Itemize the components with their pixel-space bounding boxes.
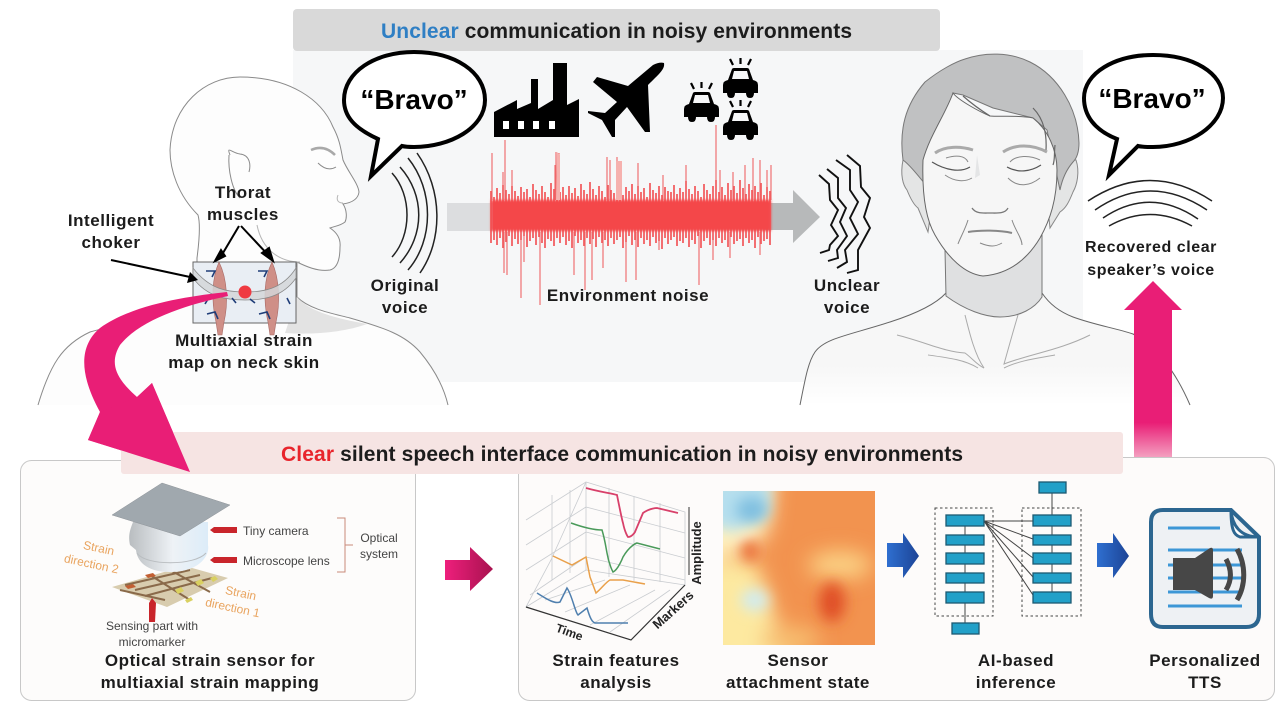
tiny camera plate <box>112 483 230 536</box>
icon: TTS document with speaker <box>1151 510 1259 627</box>
label: unclear voice: Unclear <box>814 276 880 295</box>
brows and closed eyes <box>932 146 1047 185</box>
chart: 3D strain features <box>526 482 689 640</box>
grid <box>526 482 685 640</box>
hair <box>902 54 1079 190</box>
arrow: pink up arrow <box>1124 281 1182 458</box>
neck <box>945 235 1042 317</box>
label: intelligent choker: choker <box>81 233 141 252</box>
choker band <box>193 268 296 300</box>
label: sensor attachment state: attachment state <box>726 673 870 692</box>
label: recovered clear speaker's voice: Recovered clear <box>1085 239 1217 256</box>
label: intelligent choker: Intelligent <box>68 211 154 230</box>
label: strain direction 2: direction 2 <box>63 551 120 577</box>
arrow: choker pointer <box>111 260 198 283</box>
strain curve: green <box>571 523 660 572</box>
microscope lens body <box>129 522 208 572</box>
muscle: right <box>265 262 279 335</box>
panel: processing pipeline <box>518 458 1274 700</box>
icon: recovered voice waves <box>1088 180 1212 226</box>
sensing chip <box>112 566 228 607</box>
label: multiaxial strain map: map on neck skin <box>168 353 320 372</box>
icon: unclear voice squiggles <box>819 155 870 273</box>
arrow: grey voice arrow <box>447 190 820 243</box>
label: tiny camera: Tiny camera <box>243 524 309 538</box>
optical system bracket <box>337 518 353 572</box>
label: unclear voice: voice <box>824 298 870 317</box>
label: amplitude axis: Amplitude <box>689 521 704 585</box>
figure: speaker wearing choker <box>38 77 448 405</box>
red pointers <box>149 527 237 622</box>
label: thorat muscles: muscles <box>207 205 279 224</box>
panel title: Optical strain sensor for <box>105 651 315 670</box>
label: sensing part: micromarker <box>119 635 185 649</box>
icon: factory <box>494 63 579 137</box>
diagram: neural network <box>935 482 1081 634</box>
fringe strands <box>963 96 1055 165</box>
ears <box>902 160 934 232</box>
label: microscope lens: Microscope lens <box>243 554 330 568</box>
icon: closed eye and brow <box>311 148 336 169</box>
heading: unclear communication: Unclear communication in noisy environments <box>381 20 852 43</box>
label: thorat muscles: Thorat <box>215 183 271 202</box>
icon: original voice waves <box>392 153 437 273</box>
label: environment noise: Environment noise <box>547 286 709 305</box>
icon: car one <box>684 82 719 122</box>
nose and mouth <box>958 208 1022 246</box>
arrow: pink curved from neck to sensor <box>84 292 228 472</box>
callout: left speech bubble: “Bravo” <box>360 84 468 115</box>
arrow: blue arrow to inference <box>887 533 919 578</box>
label: personalized TTS: Personalized <box>1149 651 1261 670</box>
sensor node <box>238 286 252 298</box>
label: original voice: Original <box>371 276 439 295</box>
panel: unclear communication background <box>293 50 1083 382</box>
label: strain features analysis: Strain features <box>552 651 680 670</box>
callout: right speech bubble <box>1084 55 1223 175</box>
callout: right speech bubble: “Bravo” <box>1098 83 1206 114</box>
icon: car two <box>723 58 758 98</box>
arrow: blue arrow to TTS <box>1097 533 1129 578</box>
icon: car three <box>723 100 758 140</box>
label: recovered clear speaker's voice: speaker’s voice <box>1087 262 1215 279</box>
face <box>923 93 1057 276</box>
chart: sensor attachment heatmap <box>723 491 875 645</box>
heading: clear communication <box>121 432 1123 474</box>
arrow: pink flow arrow <box>445 547 493 591</box>
strain markers <box>200 271 290 319</box>
icon: airplane <box>588 63 664 137</box>
icon: ear <box>229 150 250 198</box>
chart: environment noise waveform <box>491 125 771 305</box>
figure: listener <box>800 54 1190 405</box>
label: optical system: Optical <box>360 531 398 545</box>
label: sensor attachment state: Sensor <box>768 651 828 670</box>
collar lines <box>897 315 1090 368</box>
label: strain direction 1: Strain <box>224 583 258 603</box>
label: strain features analysis: analysis <box>580 673 652 692</box>
label: sensing part: Sensing part with <box>106 619 198 633</box>
strain curve: blue <box>537 588 628 623</box>
muscle: left <box>213 262 227 335</box>
label: AI-based inference: inference <box>976 673 1056 692</box>
nose and jaw line <box>257 195 343 262</box>
label: markers axis: Markers <box>649 587 697 632</box>
heading: clear communication: Clear silent speech interface communication in noisy environments <box>281 443 963 466</box>
label: personalized TTS: TTS <box>1188 673 1222 692</box>
label: AI-based inference: AI-based <box>978 651 1054 670</box>
panel title: multiaxial strain mapping <box>101 673 319 692</box>
callout: left speech bubble <box>344 52 485 176</box>
label: strain direction 2: Strain <box>82 538 116 558</box>
label: optical system: system <box>360 547 398 561</box>
label: multiaxial strain map: Multiaxial strain <box>175 331 313 350</box>
arrow: curved arrow head overlapping heading <box>88 383 190 472</box>
label: original voice: voice <box>382 298 428 317</box>
heading: unclear communication <box>293 9 940 51</box>
arrows: muscles pointers <box>215 226 273 261</box>
shoulders <box>800 293 1190 405</box>
label: strain direction 1: direction 1 <box>204 595 261 620</box>
strain curve: red <box>586 488 678 537</box>
label: time axis: Time <box>554 621 585 644</box>
panel: optical strain sensor <box>20 460 416 700</box>
panel: multiaxial strain map on neck <box>193 262 296 335</box>
neck shadow <box>285 297 367 334</box>
strain curve: orange <box>553 556 645 593</box>
